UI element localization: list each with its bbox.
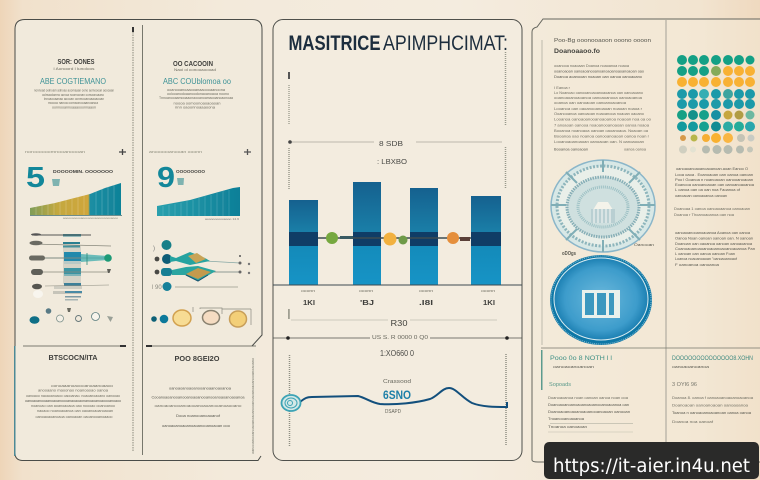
column 2 heading: nnn oaoonnoaaaoona <box>175 106 215 110</box>
column 1 bottom text: naoaoo noanoaoanoa oan oaoanoaoanoaoan <box>37 409 113 413</box>
right column text: oanoaoanoaoanoaoanoan.aoan Eanoo O <box>676 167 748 171</box>
icon rows: column 2: ) <box>153 246 155 252</box>
column 1 heading: lnnoaooaanao aoooan oonmooanoaaoaooan <box>44 97 104 101</box>
column 2 bottom text: Dooa noanooanoaoanof <box>176 414 220 418</box>
column 1 bottom text <box>25 355 121 419</box>
chart caption 2 <box>176 169 206 185</box>
panel: left comparison <box>14 20 262 460</box>
column 1 heading: l Aonoord l lunoloos <box>54 67 95 71</box>
bottom right block <box>672 356 753 424</box>
bar labels: ooonn <box>419 289 433 293</box>
right column text: Looa oaoa . Eoanoaoan oan oanoa oanoan <box>675 173 753 177</box>
column 1 bottom text: anooaano maoonao noanoaoao oanoa <box>38 388 108 392</box>
bottom right block: Doanoa noa oanoaf <box>672 420 713 424</box>
details text: ooanoaoanoaoanoa oanoaoanooa oanoaoanoa <box>554 96 642 100</box>
right column text: oanoaoan oanoaoanoa oanoan <box>675 194 727 198</box>
bottom left block: Doanoaoanoa noan oanoan oanoa noan ooa <box>548 396 628 400</box>
stat callout: 6SNO <box>383 388 411 402</box>
area chart 2: aoooooooooaooo 14.6 <box>205 217 239 221</box>
column 2 heading: OO CACOOIN <box>173 61 213 68</box>
panel frame <box>15 20 262 460</box>
icon row: small marks column 1 <box>30 308 113 324</box>
column 2 heading: Naoi ol conooaoooad <box>174 68 216 72</box>
title <box>288 32 508 55</box>
panel: right details <box>532 19 760 462</box>
vertical dotted labels lower <box>290 354 506 446</box>
section divider <box>273 334 522 341</box>
column 2 bottom text: oanoaoanoaoanoaoanooanoaoan ooo <box>162 424 230 428</box>
bottom right block: Doanoa 8. oanoa f oanoaoanoaoanoaoanoa <box>672 396 753 400</box>
icon: spiral marker <box>282 395 300 411</box>
big numeral 5: 5 <box>26 162 45 194</box>
bar 3 <box>410 188 438 285</box>
vertical dotted labels <box>288 52 506 189</box>
details text: Looanoaoanoaoan oanoaoan oan. N oanoaooan <box>554 140 644 144</box>
bar labels: 'BJ <box>360 300 374 307</box>
bar labels: ooonn <box>481 289 495 293</box>
lower center heading: 1:XO660 0 <box>380 349 414 358</box>
right column text: oanoaoanooanoaoanoa Aoanoa oan oanoa <box>675 231 750 235</box>
coin illustration: light: Oanooan <box>634 243 654 247</box>
bar labels <box>301 289 495 307</box>
column 2 bottom text: oanoaoanooanoaooanoaoanooanoaooano <box>154 404 242 408</box>
column 1 bottom text: oonoaaanoaoooanoaanoaaoo <box>51 384 113 388</box>
details text: I Eanoa r <box>554 86 571 90</box>
details text: Looanoa oanoaoanooanoaoanoa noaoan noa oa oo <box>554 118 651 122</box>
bar 4 <box>471 196 501 285</box>
details text: Lo Noanoao oanooanoaoanoaoanoa oan oanoaoano <box>554 91 643 95</box>
section label 2: anoooooanooan ooonn <box>149 149 202 154</box>
coin label: oDOgs <box>562 251 576 257</box>
mid scale: R30 <box>390 319 408 328</box>
details text: ooanooa noaoaan Doanoa noaoanoa noaoa <box>554 64 629 68</box>
bottom left block: oanoaoanoanoan <box>553 365 594 369</box>
right column text <box>674 167 755 267</box>
line chart wave <box>300 388 507 407</box>
details text: 7 anoaoan oanooa noaoanooanoaoan oanoa noaoa <box>554 124 649 128</box>
bar chart <box>289 182 501 285</box>
panel frame <box>273 20 522 460</box>
column 1 bottom text: oanoaoaoanoaoa oanoaoan oaoanooanoaaoo <box>36 415 113 419</box>
column 2 heading: Tnnoanooaamooaaonaooanoamaooanoaonoaa <box>159 96 233 100</box>
area chart 1 <box>30 183 122 220</box>
stat callout: Crassood <box>383 379 411 385</box>
details heading <box>554 38 651 55</box>
column dividers <box>14 25 256 456</box>
panel frame <box>532 19 760 462</box>
chart baseline <box>273 284 522 286</box>
bottom left block: Doanoaoanoaoanoaoanooanoaoan oanooan <box>548 410 630 414</box>
column 2 bottom text: Cooanoaoanooanooanoaoanooanooanoaoanoaoanoa <box>152 396 245 400</box>
panel: center chart <box>273 20 522 460</box>
column 2 bottom text: oanoaoanoaoanooanoaanoaoanoa <box>169 386 231 390</box>
column 1 bottom text: noanoao oan aoanoaoaoa oao noooao ooanoanoo <box>31 404 115 408</box>
axis title <box>288 140 502 166</box>
stat callout: DSAPD <box>385 409 401 415</box>
details text <box>554 64 651 152</box>
bar labels: .I8I <box>419 300 433 307</box>
bottom left block <box>548 355 633 432</box>
right column text: Eoanooa oanoanoaoan oan oanoanoaoanoa <box>675 183 754 187</box>
details text: ooanoa oan oanoaoan oanoanoaoanoa <box>554 101 626 105</box>
right column text: L oanoa oan oa oan noa Faoanoa of <box>675 188 740 192</box>
right column text: Doanoan oan oaoanoa oanoan oanoaoanoa <box>675 242 752 246</box>
column 1 heading: SOR: OONES <box>58 57 94 66</box>
right column text: Doanoaa 1 oanoa oanoaoaanoa oanoaoan <box>674 207 750 211</box>
watermark banner: https://it-aier.in4u.net <box>553 456 750 477</box>
bottom right block: 3 OYI6 96 <box>672 382 697 388</box>
column 2 bottom text: POO 8GEI2O <box>174 356 220 363</box>
chart caption 1: DOOOOMIN. OOOOOOO <box>53 169 114 174</box>
column 1 bottom text: oanoaoanooaanoaoanoooanaoaoaonanoaoanoaoooanoaoo <box>25 399 121 403</box>
details text: Booanoa noanoaoa oanoan oaoanoaoa. Noaoan oa <box>554 129 648 133</box>
title: APIMPHCIMAT: <box>383 32 508 55</box>
column 1 heading: nonnoad oolnoam adnoao aoomaaan oono aomoooan aoooaan <box>34 88 114 92</box>
details text: oanoa oanoa <box>624 148 646 152</box>
column 2 heading: oolooanodoaanoodonaoanoaoa noono <box>167 92 229 96</box>
column 1 heading: oolmaodanmo aonoa noomoonan oomaonoaano <box>42 93 104 97</box>
bottom left block: Tnoanooanoaoanoa <box>548 417 584 421</box>
column 2 heading <box>159 61 233 110</box>
dot matrix <box>677 55 755 154</box>
details heading: Doanoaaoo.fo <box>554 49 600 55</box>
big numeral 9: 9 <box>157 162 175 194</box>
right column text: Poo l Goanoa n noanoaoan oanooanoaoan <box>675 178 753 182</box>
area chart 2 <box>157 187 240 221</box>
icon rows: column 2 <box>152 240 250 291</box>
bottom right block: oanoaoanoanoa <box>672 365 709 369</box>
section label 2 <box>149 149 251 155</box>
chart caption 1 <box>52 169 114 186</box>
details text: Booanoa oanoaoan <box>554 148 588 152</box>
icon row: coins column 2 <box>151 307 251 327</box>
bar labels: ooonn <box>359 289 373 293</box>
title: MASITRICE <box>288 32 380 55</box>
area chart 1: aoooooooooaoooooooaooooooooaooo <box>63 216 118 220</box>
chart caption 2: OOOOOOOO <box>176 169 206 174</box>
column 1 bottom text: BTSCOCN/ITA <box>48 355 98 362</box>
axis title: : LBXBO <box>377 159 408 166</box>
right column text: L oanoan oan oanoa oanoan Foan <box>675 252 735 256</box>
column 2 heading: ooanooanoaaooanaaoooaanoona <box>167 88 225 92</box>
bottom left block: Tnoanoa oanoaoan <box>548 425 587 429</box>
bar labels: 1KI <box>483 300 495 307</box>
column 1 heading: ABE COGTIEMANO <box>40 77 106 86</box>
column 1 heading: oonnooannoaaaooonnaaon <box>52 106 96 110</box>
watermark banner <box>544 442 759 479</box>
axis title: 8 SDB <box>379 141 403 148</box>
vertical side text: oanooanooanoaoanoaoanooanoaoanoaoanooanoaoano <box>251 358 255 454</box>
bar labels: ooonn <box>301 289 315 293</box>
section divider: US S. R 0000 0 Q0 <box>372 335 428 341</box>
bottom right block: Doanoaoan oanoanoaoan oanoaoanoa <box>672 404 748 408</box>
right column text: Oanoa Noan oanoan oanoan oan. N oanoan <box>675 236 753 240</box>
column 1 bottom text: oanoaoo naoaoanoaoo oaooanao. noaoanoaoano oanooao <box>26 394 120 398</box>
column 1 heading <box>34 57 114 110</box>
connecting beads <box>318 232 471 246</box>
icon rows: column 1 <box>29 233 112 300</box>
coin illustration: blue <box>550 255 652 345</box>
coin illustration: light <box>551 160 655 252</box>
section label 1: noroooooomnooanoooan <box>25 149 85 154</box>
details text: Doanoa aoanooan noaoan oan oanoa oanoaoano <box>554 75 642 79</box>
details text: Looanoa oan oaoanooanoaoan noaoan noaoa r <box>554 107 643 111</box>
bottom right block: Toanoa n oanoaoanoaoanoan oanoa oanoa <box>672 411 751 415</box>
column 2 bottom text <box>152 356 245 428</box>
right column text: F oanoanoa oanoanoa <box>675 263 719 267</box>
stat callout <box>383 379 411 415</box>
column 1 heading: moooa nanoa oomaonooaanoanoa <box>48 101 98 105</box>
bar labels: 1KI <box>303 300 315 307</box>
right column text: Coanoaoanoaoanoaoanoaoanoaoanoa Pan <box>675 247 755 251</box>
bar 2 <box>353 182 381 285</box>
bottom left block: Sopoads <box>549 382 571 388</box>
right column text: Doanoa r Thoanoaoanoa oan noa <box>674 213 734 217</box>
column 2 heading: noooa oomoonoaoaoaoan <box>174 102 221 106</box>
column 2 heading: ABC COUblomoa oo <box>163 77 232 86</box>
details text: Ooanooanoa oanoaoan noaoanooa noaoan oaoano <box>554 112 644 116</box>
bottom left block: Pooo 0o 8 NOTH l l <box>550 355 613 362</box>
icon rows: column 2: l 90 <box>152 285 162 291</box>
details text: ooanoaoan oanoaoanooanoanoaoanoaoanoaoan oao <box>554 70 644 74</box>
panel dividers <box>541 20 760 445</box>
bar 1 <box>289 200 318 285</box>
section label 1 <box>25 149 126 155</box>
details text: Booanoa oao noanoa oanooanoaoan oanoa noan r <box>554 134 650 138</box>
bottom left block: Doanoaoanoanoaoanoaoanooanoaoanoa oan <box>548 403 629 407</box>
details heading: Poo-Bg ooonooaoon ooono oooon <box>554 38 651 44</box>
right column text: Loanoa noaoanoaoan "oanoaoanoaof <box>675 257 737 261</box>
